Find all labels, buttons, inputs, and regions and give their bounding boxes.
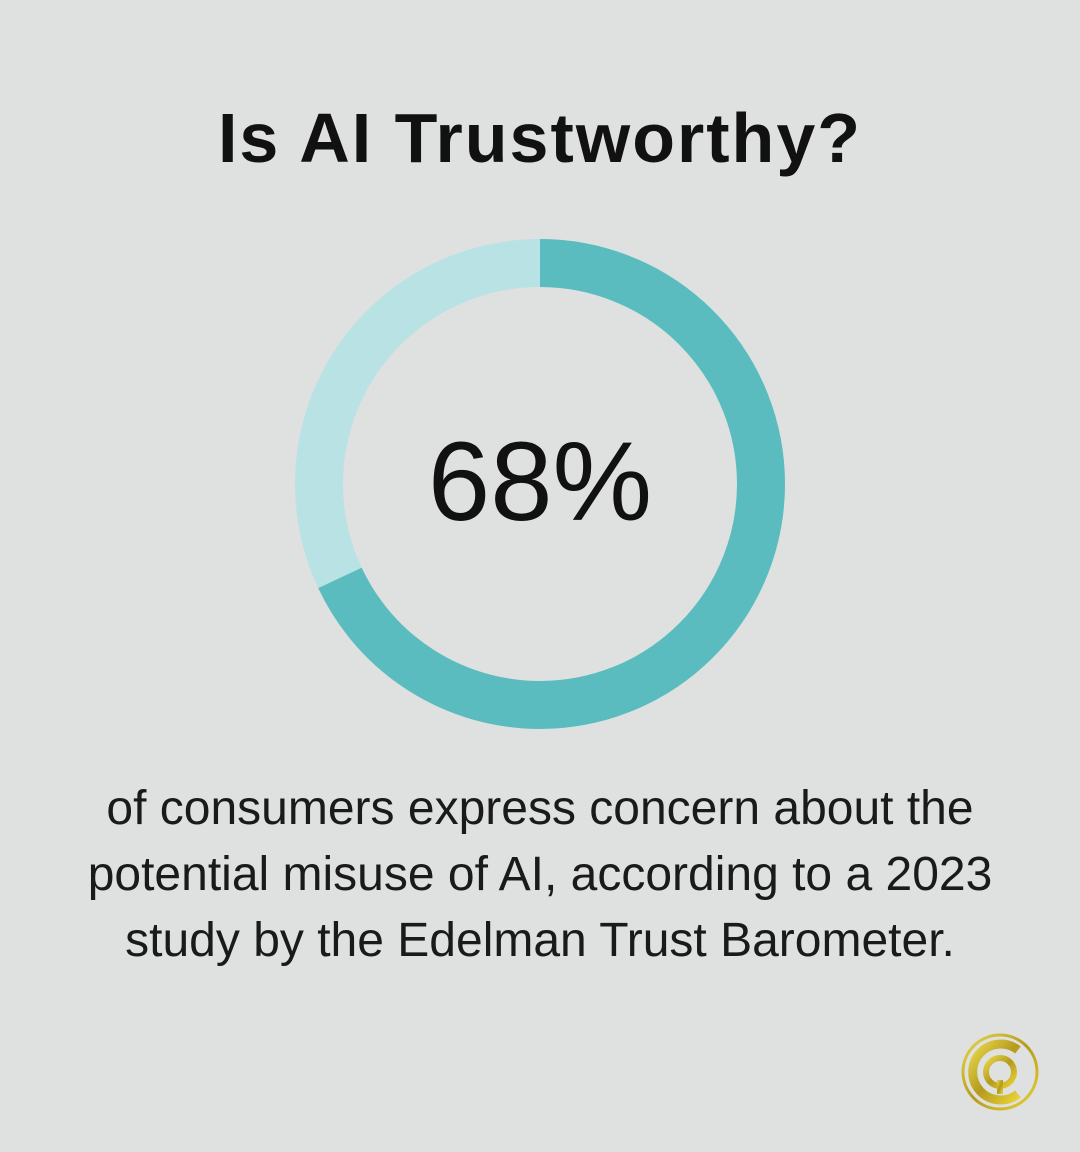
description text: study by the Edelman Trust Barometer. xyxy=(125,914,955,967)
description text: potential misuse of AI, according to a 2023 xyxy=(88,848,992,901)
description text: of consumers express concern about the xyxy=(106,782,974,835)
percentage: 68% xyxy=(428,419,652,544)
icon: logo xyxy=(962,1034,1038,1110)
title: Is AI Trustworthy? xyxy=(218,99,862,177)
description text xyxy=(88,782,992,967)
